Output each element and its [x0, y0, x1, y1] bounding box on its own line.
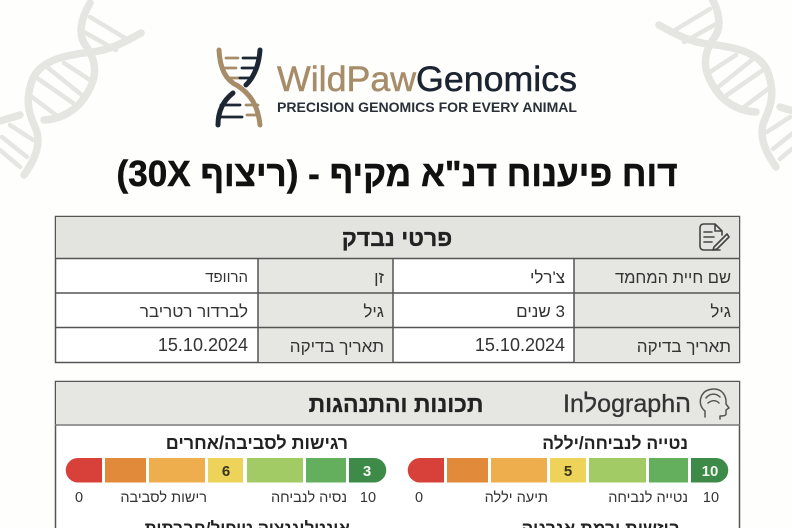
scale labels: נטייה לנביחה — [608, 489, 688, 506]
scale labels: 10 — [360, 490, 376, 506]
scale labels: רישות לסביבה — [120, 489, 207, 506]
row labels and values: גיל — [363, 302, 384, 321]
score 5: 5 — [564, 463, 572, 480]
score 10: 10 — [702, 463, 718, 480]
heading: subject details: פרטי נבדק — [342, 225, 452, 251]
row labels and values: זן — [374, 268, 384, 287]
heading: garbled label: Inלographה — [563, 390, 691, 418]
icon: document with pencil — [700, 224, 729, 250]
gauge title: נטייה לנביחה/יללה — [542, 433, 688, 453]
panel header — [56, 217, 739, 258]
decorative DNA helix top right — [659, 0, 792, 167]
logo: WildPawGenomics — [218, 50, 577, 125]
row labels and values: 3 שנים — [516, 302, 565, 321]
row labels and values: לברדור רטריבר — [140, 302, 248, 321]
score 3: 3 — [363, 463, 371, 480]
row labels and values: גיל — [710, 302, 731, 321]
row labels and values: תאריך בדיקה — [290, 337, 384, 356]
tagline: PRECISION GENOMICS FOR EVERY ANIMAL — [277, 100, 577, 115]
row labels and values — [140, 268, 731, 356]
decorative DNA helix top left — [0, 3, 141, 175]
gauge: howling / barking — [408, 433, 728, 506]
scale labels: 0 — [75, 490, 83, 506]
scale labels — [415, 489, 719, 506]
title: דוח פיענוח דנ"א מקיף - (ריצוף 30X) — [116, 153, 678, 194]
icon: brain in head — [700, 389, 729, 419]
gauge title: רגישות לסביבה/אחרים — [166, 433, 348, 453]
scale labels: נסיה לנביחה — [271, 489, 347, 506]
scale labels: תיעה יללה — [485, 489, 548, 506]
heading: traits and behavior: תכונות והתנהגות — [309, 391, 483, 417]
gauge bar — [408, 458, 728, 482]
icon: DNA helix — [218, 50, 260, 125]
label cells — [258, 259, 739, 362]
wordmark: WildPawGenomics — [277, 60, 577, 99]
gauge: sensitivity to surroundings — [66, 433, 386, 506]
scale labels — [75, 489, 376, 506]
row labels and values: שם חיית המחמד — [615, 269, 731, 287]
row labels and values: 15.10.2024 — [475, 335, 565, 355]
row labels and values: הרוופד — [205, 269, 248, 286]
row labels and values: צ'רלי — [530, 268, 565, 287]
row labels and values: תאריך בדיקה — [637, 337, 731, 356]
panel: traits and behavior — [55, 382, 740, 528]
scale labels: 10 — [703, 490, 719, 506]
score 6: 6 — [222, 463, 230, 480]
panel: subject details — [55, 216, 740, 362]
row labels and values: 15.10.2024 — [158, 335, 248, 355]
panel header — [56, 382, 739, 424]
gauge bar — [66, 458, 386, 482]
scale labels: 0 — [415, 490, 423, 506]
